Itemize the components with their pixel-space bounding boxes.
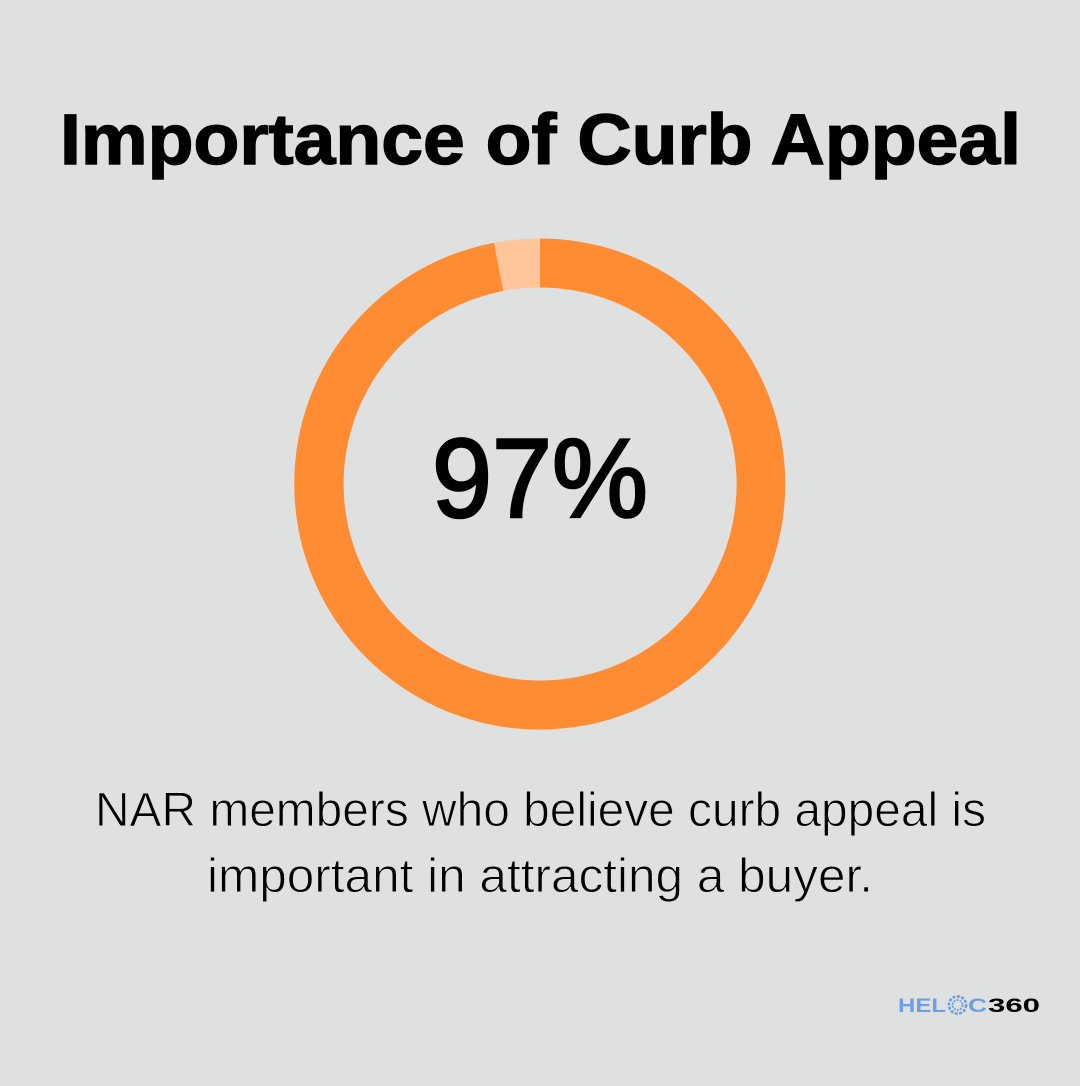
description text: NAR members who believe curb appeal is	[95, 784, 986, 837]
donut chart	[294, 238, 785, 729]
center value: 97%	[432, 416, 648, 541]
logo text: 360: 360	[988, 996, 1040, 1017]
logo	[898, 996, 1040, 1017]
donut remainder segment: 3%	[494, 238, 540, 291]
logo text: C: C	[968, 996, 987, 1017]
title: Importance of Curb Appeal	[60, 101, 1021, 180]
logo text: HEL: HEL	[898, 996, 946, 1017]
description text: important in attracting a buyer.	[207, 850, 873, 903]
logo icon: swirl O	[949, 996, 966, 1014]
donut main segment: 97%	[294, 238, 785, 729]
description text	[95, 784, 986, 903]
